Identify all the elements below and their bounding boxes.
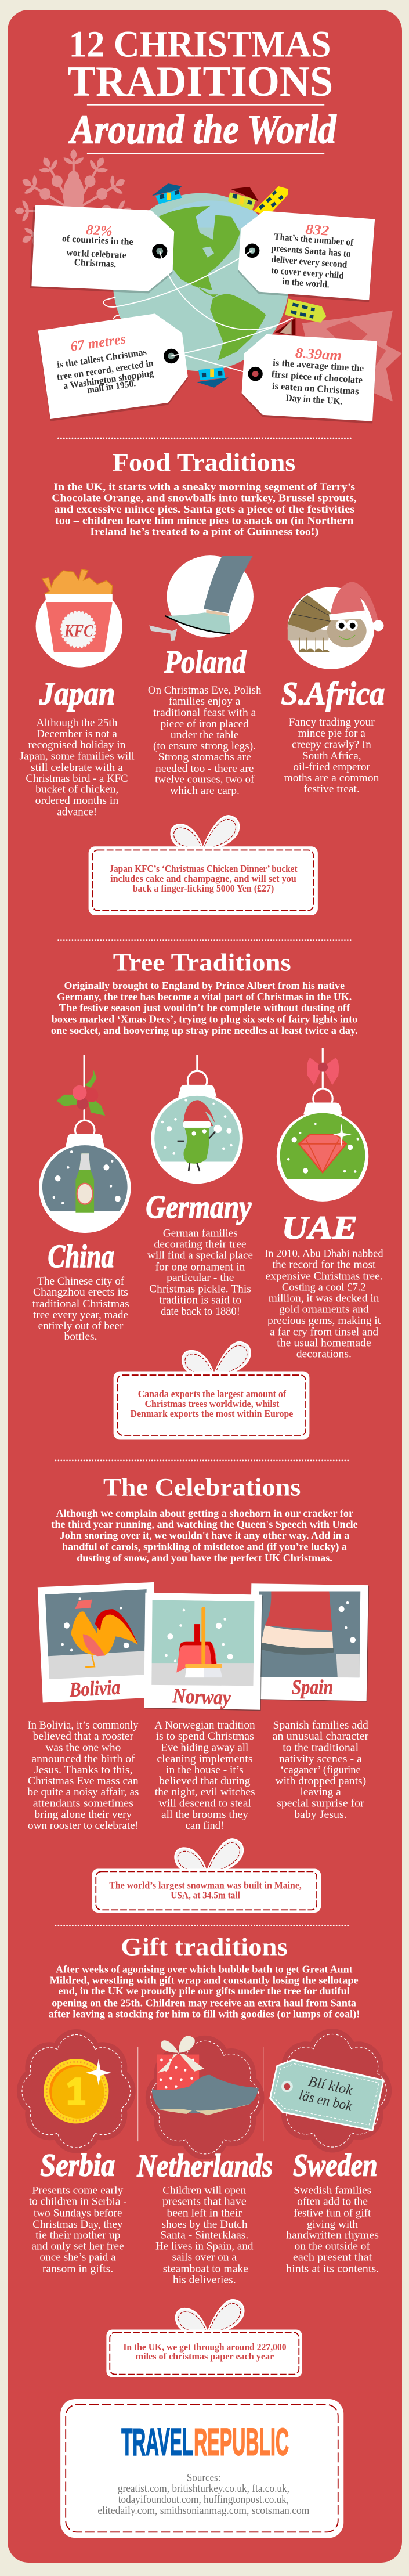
text: Bolivia bbox=[28, 1719, 139, 1831]
text: Poland: families enjoy a bbox=[169, 695, 240, 707]
tag: 67 metres: a Washington shopping bbox=[63, 368, 154, 391]
text: Japan: Although the 25th bbox=[36, 717, 117, 728]
text: UAE: million, it was decked in bbox=[269, 1292, 379, 1304]
text: Germany bbox=[146, 1189, 253, 1317]
text: Norway: in the house - it’s bbox=[166, 1764, 244, 1776]
tag: 82%: of countries in the bbox=[62, 234, 133, 247]
text: Bolivia: be quite a noisy affair, as bbox=[28, 1786, 139, 1798]
intro text: food: In the UK, it starts with a sneaky morning segment of Terry’s bbox=[53, 481, 355, 492]
text: Germany: date back to 1880! bbox=[161, 1305, 240, 1317]
tag: 832 bbox=[238, 211, 375, 302]
tag: 8.39am: is the average time the bbox=[273, 358, 364, 374]
text: Japan: December is not a bbox=[37, 728, 117, 739]
tag: 8.39am bbox=[242, 334, 377, 424]
text: UAE: In 2010, Abu Dhabi nabbed bbox=[265, 1247, 383, 1260]
text: Netherlands: Children will open bbox=[162, 2184, 246, 2196]
text: Bolivia: In Bolivia, it’s commonly bbox=[28, 1719, 139, 1731]
text: Poland: piece of iron placed bbox=[161, 718, 249, 730]
text: Bolivia: Christmas Eve mass can bbox=[28, 1775, 139, 1787]
text: Serbia: Presents come early bbox=[32, 2184, 124, 2196]
gift box: christmas paper fact: In the UK, we get through around 227,000 bbox=[123, 2343, 287, 2353]
text: Sweden: often add to the bbox=[297, 2195, 368, 2207]
intro text: tree: one socket, and hoovering up stray pine needles at least twice a day. bbox=[51, 1024, 358, 1036]
text: Sweden: on the outside of bbox=[295, 2240, 371, 2252]
text: Sweden: Swedish families bbox=[294, 2184, 371, 2196]
text: Japan: recognised holiday in bbox=[28, 738, 125, 751]
text: China: traditional Christmas bbox=[32, 1298, 129, 1309]
text: Germany: particular - the bbox=[167, 1272, 234, 1283]
text: Serbia bbox=[29, 2147, 127, 2275]
text: Sweden: festive fun of gift bbox=[294, 2207, 371, 2219]
title: Around the World bbox=[68, 107, 337, 153]
globe bbox=[113, 193, 289, 371]
tag: 832: 832 bbox=[305, 222, 330, 239]
heading: the celebrations: The Celebrations bbox=[103, 1474, 301, 1501]
gift box: snowman fact bbox=[92, 1839, 321, 1913]
text: Netherlands: shoes by the Dutch bbox=[161, 2218, 248, 2230]
text: Spain: special surprise for bbox=[277, 1797, 364, 1809]
sources: Sources: bbox=[187, 2472, 220, 2483]
food traditions section bbox=[20, 438, 385, 818]
text: Japan: Japan bbox=[39, 675, 115, 712]
text: Germany: will find a special place bbox=[147, 1249, 253, 1261]
ornament: UAE diamond bbox=[277, 1048, 368, 1202]
text: Norway: cleaning implements bbox=[157, 1753, 253, 1765]
intro text: celebrations bbox=[51, 1507, 358, 1564]
gift box: KFC fact: includes cake and champagne, and will set you bbox=[110, 874, 296, 884]
tag: 82% bbox=[30, 205, 174, 293]
column dividers bbox=[138, 2047, 263, 2141]
divider dots bbox=[56, 1459, 349, 1462]
polaroid: Norway broom bbox=[144, 1593, 263, 1711]
gift box: snowman fact: The world’s largest snowman was built in Maine, bbox=[109, 1881, 302, 1891]
text: Netherlands bbox=[137, 2147, 273, 2286]
title: 12 CHRISTMAS bbox=[69, 24, 331, 65]
gift box: Canada fact: Christmas trees worldwide, whilst bbox=[144, 1399, 280, 1409]
text: Poland bbox=[148, 644, 262, 796]
text: Serbia: Christmas Day, they bbox=[32, 2218, 123, 2230]
text: South Africa: South Africa, bbox=[302, 750, 361, 762]
text: Spain: Spanish families add bbox=[273, 1719, 369, 1731]
ornament: Germany pickle bbox=[151, 1055, 243, 1184]
text: Norway: Eve hiding away all bbox=[161, 1741, 248, 1754]
intro text: gifts: After weeks of agonising over which bubble bath to get Great Aunt bbox=[56, 1963, 353, 1975]
tag: 67 metres bbox=[38, 313, 188, 421]
text: Bolivia: own rooster to celebrate! bbox=[28, 1820, 139, 1831]
polaroid: Spain caganer bbox=[249, 1583, 369, 1702]
text: Netherlands: been left in their bbox=[167, 2207, 242, 2219]
text: Spain: leaving a bbox=[301, 1786, 341, 1798]
sources bbox=[97, 2472, 310, 2516]
intro text: food: and excessive mince pies. Santa gets a piece of the festivities bbox=[54, 503, 354, 515]
gifts text and footer section bbox=[29, 2147, 379, 2538]
gift box: KFC fact: back a finger-licking 5000 Yen (£27) bbox=[133, 884, 274, 894]
tag: 8.39am: is eaten on Christmas bbox=[272, 381, 359, 397]
polaroid: Norway broom: Norway bbox=[172, 1684, 231, 1709]
text: Germany: decorating their tree bbox=[154, 1238, 247, 1250]
text: Norway: can find! bbox=[186, 1820, 224, 1831]
text: UAE: UAE bbox=[281, 1210, 357, 1246]
gift box: KFC fact bbox=[89, 816, 318, 915]
text: Spain: an unusual character bbox=[273, 1730, 368, 1742]
text: Spain: with dropped pants) bbox=[276, 1775, 366, 1787]
gift box: christmas paper fact bbox=[106, 2300, 302, 2377]
text: Norway: will descend to steal bbox=[158, 1797, 251, 1809]
text: Norway: is to spend Christmas bbox=[156, 1730, 254, 1742]
text: UAE: Costing a cool £7.2 bbox=[282, 1281, 366, 1293]
polaroid: Bolivia rooster bbox=[38, 1582, 159, 1703]
polaroid: Bolivia rooster: Bolivia bbox=[68, 1676, 121, 1701]
intro text: food bbox=[52, 481, 357, 537]
text: Norway: A Norwegian tradition bbox=[154, 1719, 255, 1731]
text: Sweden: each present that bbox=[293, 2251, 372, 2263]
icon: foot on iron bbox=[149, 555, 254, 641]
text: Bolivia: attendants sometimes bbox=[33, 1797, 133, 1809]
text: South Africa bbox=[281, 675, 385, 795]
text: UAE: the record for the most bbox=[273, 1258, 376, 1271]
intro text: food: Chocolate Orange, and snowballs into turkey, Brussel sprouts, bbox=[52, 492, 357, 504]
tag: 832: to cover every child bbox=[271, 266, 344, 281]
footer card bbox=[60, 2399, 343, 2538]
text: Serbia: once she’s paid a bbox=[39, 2251, 116, 2263]
text: Serbia: and only set her free bbox=[31, 2240, 124, 2252]
text: Germany: Christmas pickle. This bbox=[149, 1283, 251, 1295]
text: Serbia: ransom in gifts. bbox=[42, 2263, 113, 2275]
icon: moth in Santa hat bbox=[288, 582, 384, 669]
intro text: celebrations: Although we complain about getting a shoehorn in our cracker for bbox=[56, 1507, 353, 1519]
text: Germany: Germany bbox=[146, 1189, 252, 1225]
text: Bolivia: believed that a rooster bbox=[33, 1730, 133, 1742]
tag: 67 metres: 67 metres bbox=[70, 331, 126, 355]
title: TRADITIONS bbox=[68, 57, 333, 105]
text: Bolivia: bring alone their very bbox=[34, 1808, 132, 1820]
text: South Africa: oil-fried emperor bbox=[293, 761, 370, 773]
divider dots bbox=[56, 1924, 349, 1927]
icon: gift tag Sweden: Blí klok bbox=[307, 2074, 354, 2099]
text: Bolivia: Jesus. Thanks to this, bbox=[34, 1764, 133, 1776]
text: South Africa: creepy crawly? In bbox=[292, 738, 371, 750]
text: Japan: Christmas bird - a KFC bbox=[26, 773, 128, 784]
icon: clog with present bbox=[151, 2036, 259, 2154]
text: Sweden: Sweden bbox=[293, 2147, 378, 2183]
sources: elitedaily.com, smithsonianmag.com, scotsman.com bbox=[97, 2505, 310, 2516]
intro text: celebrations: the third year running, and watching the Queen's Speech with Uncle bbox=[51, 1518, 358, 1530]
text: Spain: nativity scenes - a bbox=[279, 1753, 362, 1765]
text: Japan: bucket of chicken, bbox=[35, 783, 118, 795]
text: Poland: twelve courses, two of bbox=[155, 773, 255, 785]
text: Germany: for one ornament in bbox=[155, 1261, 245, 1272]
text: UAE: a far cry from tinsel and bbox=[270, 1326, 379, 1338]
heading: gift traditions: Gift traditions bbox=[121, 1933, 288, 1961]
text: Poland: (to ensure strong legs). bbox=[153, 740, 256, 752]
ornament: China beer bottle bbox=[39, 1055, 131, 1233]
text: Spain bbox=[273, 1719, 369, 1820]
text: Bolivia: announced the birth of bbox=[31, 1753, 136, 1765]
text: Sweden: giving with bbox=[307, 2218, 358, 2230]
gift box: snowman fact: USA, at 34.5m tall bbox=[171, 1890, 240, 1901]
text: Norway: all the brooms they bbox=[161, 1808, 249, 1820]
celebrations section bbox=[38, 1342, 369, 1711]
text: Germany: German families bbox=[163, 1227, 238, 1239]
text: UAE: decorations. bbox=[296, 1348, 352, 1359]
text: China: tree every year, made bbox=[33, 1309, 128, 1321]
intro text: tree: The festive season just wouldn’t be complete without dusting off bbox=[59, 1002, 350, 1013]
text: Norway bbox=[154, 1719, 255, 1831]
text: Serbia: to children in Serbia - bbox=[29, 2195, 127, 2207]
text: Serbia: two Sundays before bbox=[34, 2207, 122, 2219]
heading: food traditions: Food Traditions bbox=[113, 449, 295, 477]
tag: 82%: Christmas. bbox=[74, 258, 117, 269]
intro text: tree: Originally brought to England by Prince Albert from his native bbox=[64, 980, 345, 991]
icon: gift tag Sweden: läs en bok bbox=[298, 2088, 354, 2115]
text: Netherlands: Netherlands bbox=[137, 2147, 273, 2184]
icon: snowflake star bottom right bbox=[302, 311, 402, 401]
text: Japan: Japan, some families will bbox=[20, 750, 135, 762]
gift box: christmas paper fact: miles of christmas paper each year bbox=[136, 2352, 274, 2362]
icon: KFC bucket bbox=[36, 569, 122, 668]
text: China bbox=[32, 1238, 129, 1343]
text: UAE: gold ornaments and bbox=[279, 1303, 370, 1315]
text: Serbia: Serbia bbox=[40, 2147, 115, 2183]
tag: 832: deliver every second bbox=[271, 254, 348, 270]
intro text: celebrations: John snoring over it, we wouldn't have it any other way. Add in a bbox=[60, 1529, 349, 1541]
text: Netherlands: steamboat to make bbox=[163, 2263, 248, 2275]
text: UAE: expensive Christmas tree. bbox=[265, 1270, 383, 1282]
text: Germany: tradition is said to bbox=[159, 1294, 241, 1306]
text: Japan bbox=[20, 675, 135, 818]
text: Sweden: handwritten rhymes bbox=[286, 2229, 379, 2241]
gift box: Canada fact: Canada exports the largest amount of bbox=[138, 1390, 287, 1399]
text: UAE: precious gems, making it bbox=[267, 1314, 381, 1326]
logo: Travel Republic: REPUBLIC bbox=[194, 2420, 289, 2463]
gift box: KFC fact: Japan KFC’s ‘Christmas Chicken Dinner’ bucket bbox=[109, 864, 298, 874]
intro text: celebrations: handful of carols, sprinkling of mistletoe and (if you’re lucky) a bbox=[62, 1540, 347, 1553]
text: South Africa: S.Africa bbox=[281, 675, 385, 712]
tag: 832: in the world. bbox=[282, 277, 330, 290]
tag strings bbox=[104, 251, 293, 372]
text: Spain: baby Jesus. bbox=[294, 1808, 347, 1820]
text: Norway: the night, evil witches bbox=[155, 1786, 255, 1798]
intro text: gifts: end, in the UK we proudly pile our gifts under the tree for dutiful bbox=[59, 1985, 350, 1997]
tag: 832: That’s the number of bbox=[274, 232, 354, 248]
text: China: China bbox=[48, 1238, 114, 1274]
text: UAE bbox=[265, 1210, 383, 1359]
text: South Africa: moths are a common bbox=[284, 772, 379, 784]
tag: 8.39am: first piece of chocolate bbox=[271, 370, 363, 385]
intro text: gifts bbox=[49, 1963, 360, 2019]
tree traditions section bbox=[32, 816, 383, 1359]
text: China: bottles. bbox=[64, 1330, 97, 1343]
icon: gift tag Sweden bbox=[270, 2034, 386, 2147]
text: Serbia: tie their mother up bbox=[35, 2229, 120, 2241]
text: Netherlands: his deliveries. bbox=[173, 2274, 236, 2286]
text: South Africa: Fancy trading your bbox=[289, 716, 375, 728]
text: Spain: to the traditional bbox=[283, 1741, 359, 1754]
divider dots bbox=[59, 939, 352, 942]
intro text: tree: Germany, the tree has become a vital part of Christmas in the UK. bbox=[57, 991, 352, 1002]
intro text: food: too – children leave him mince pies to snack on (in Northern bbox=[55, 514, 354, 526]
text: Japan: advance! bbox=[57, 806, 97, 818]
divider dots bbox=[59, 436, 352, 440]
gift box: Canada fact bbox=[114, 1342, 309, 1439]
header section bbox=[15, 24, 402, 424]
text: Japan: still celebrate with a bbox=[31, 762, 123, 773]
gift box: Canada fact: Denmark exports the most within Europe bbox=[131, 1409, 293, 1419]
text: Netherlands: sails over on a bbox=[172, 2251, 237, 2263]
sources: todayifoundout.com, huffingtonpost.co.uk, bbox=[118, 2494, 289, 2505]
text: UAE: the usual homemade bbox=[277, 1337, 371, 1349]
logo: Travel Republic: TRAVEL bbox=[121, 2420, 193, 2463]
intro text: celebrations: dusting of snow, and you have the perfect UK Christmas. bbox=[77, 1552, 332, 1564]
text: Poland: needed too - there are bbox=[155, 763, 254, 774]
sources: greatist.com, britishturkey.co.uk, fta.co.uk, bbox=[118, 2483, 289, 2494]
text: China: Changzhou erects its bbox=[33, 1286, 128, 1298]
text: Sweden: hints at its contents. bbox=[286, 2263, 379, 2275]
text: Netherlands: presents that have bbox=[162, 2195, 247, 2207]
icon: gold coin bbox=[22, 2034, 131, 2148]
text: Poland: Poland bbox=[164, 644, 247, 680]
text: Netherlands: He lives in Spain, and bbox=[155, 2240, 254, 2252]
icon: KFC bucket: KFC bbox=[64, 622, 94, 640]
heading: tree traditions: Tree Traditions bbox=[113, 949, 291, 977]
intro text: gifts: opening on the 25th. Children may receive an extra haul from Santa bbox=[52, 1997, 356, 2009]
text: Poland: which are carp. bbox=[170, 785, 240, 796]
icon: snowflake top left bbox=[15, 149, 133, 251]
title bbox=[68, 24, 337, 154]
tag: 832: presents Santa has to bbox=[271, 243, 351, 259]
tag: 67 metres: tree on record, erected in bbox=[56, 358, 154, 383]
text: Bolivia: was the one who bbox=[45, 1741, 121, 1754]
intro text: gifts: Mildred, wrestling with gift wrap and constantly losing the sellotape bbox=[50, 1974, 359, 1986]
intro text: gifts: after leaving a stocking for him to fill with goodies (or lumps of coal)! bbox=[49, 2008, 360, 2019]
text: South Africa: festive treat. bbox=[303, 782, 360, 795]
tag: 8.39am: Day in the UK. bbox=[285, 393, 343, 407]
text: Poland: under the table bbox=[171, 729, 239, 741]
tag: 82%: 82% bbox=[86, 223, 113, 239]
text: Norway: believed that during bbox=[159, 1775, 251, 1787]
polaroid: Spain caganer: Spain bbox=[292, 1676, 333, 1699]
intro text: tree: boxes marked ‘Xmas Decs’, trying to plug six sets of fairy lights into bbox=[52, 1013, 357, 1025]
text: Poland: Strong stomachs are bbox=[158, 751, 251, 763]
tag: 8.39am: 8.39am bbox=[295, 345, 342, 364]
intro text: food: Ireland he’s treated to a pint of Guinness too!) bbox=[90, 525, 318, 537]
tag: 67 metres: is the tallest Christmas bbox=[56, 347, 147, 370]
text: Poland: On Christmas Eve, Polish bbox=[148, 684, 262, 696]
tag: 82%: world celebrate bbox=[66, 248, 126, 261]
text: China: entirely out of beer bbox=[38, 1319, 123, 1332]
text: Sweden bbox=[286, 2147, 379, 2275]
celebrations text and gifts section bbox=[22, 1719, 386, 2154]
intro text: tree bbox=[51, 980, 358, 1036]
text: South Africa: mince pie for a bbox=[298, 727, 365, 739]
text: Poland: traditional feast with a bbox=[153, 706, 256, 719]
text: China: The Chinese city of bbox=[37, 1275, 125, 1287]
text: Japan: ordered months in bbox=[35, 795, 118, 806]
tag: 67 metres: mall in 1950. bbox=[86, 378, 136, 395]
text: Netherlands: Santa - Sinterklaas. bbox=[160, 2229, 248, 2241]
icon: houses around globe bbox=[152, 183, 326, 388]
text: Spain: ‘caganer’ (figurine bbox=[280, 1764, 361, 1776]
